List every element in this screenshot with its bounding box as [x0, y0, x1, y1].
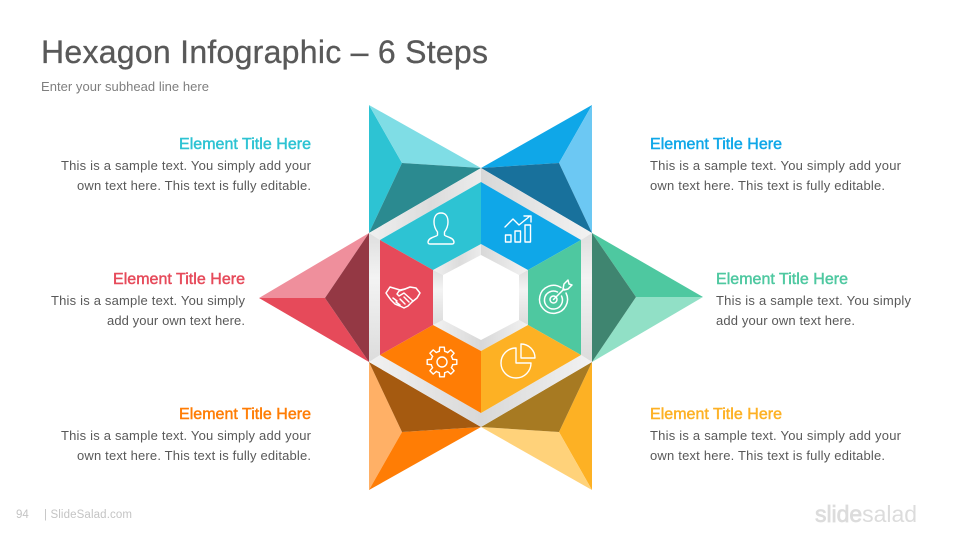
text block: top right: own text here. This text is fully editable. — [650, 178, 885, 193]
footer: page number: 94 — [16, 509, 29, 521]
tile: yellow with pie icon — [481, 325, 581, 413]
text block: bottom left — [61, 406, 312, 463]
icon: growth chart — [505, 216, 531, 242]
text block: bottom right: This is a sample text. You simply add your — [650, 428, 902, 443]
subhead: Enter your subhead line here — [41, 79, 209, 94]
text block: middle right: Element Title Here — [716, 271, 848, 288]
spike: blue — [481, 105, 592, 233]
text block: bottom left: This is a sample text. You simply add your — [61, 428, 312, 443]
tile: blue with chart icon — [481, 182, 581, 270]
spike: green — [592, 233, 703, 362]
text block: middle right — [716, 271, 912, 328]
text block: top right — [650, 136, 902, 193]
text block: bottom left: Element Title Here — [179, 406, 311, 423]
icon: handshake — [386, 287, 420, 308]
spike: yellow — [481, 362, 592, 490]
icon: gear — [427, 347, 457, 377]
text block: top left — [61, 136, 312, 193]
text block: middle left — [51, 271, 246, 328]
text block: bottom left: own text here. This text is fully editable. — [77, 448, 311, 463]
text block: top left: This is a sample text. You simply add your — [61, 158, 312, 173]
text block: middle right: add your own text here. — [716, 313, 855, 328]
tile: orange with gear icon — [380, 325, 481, 413]
text block: middle right: This is a sample text. You simply — [716, 293, 912, 308]
icon: target — [540, 280, 572, 313]
icon: pie chart — [501, 344, 535, 378]
icon: person — [428, 213, 454, 244]
tile: red with handshake icon — [380, 240, 433, 355]
spike: teal — [369, 105, 481, 233]
title: Hexagon Infographic – 6 Steps — [41, 34, 488, 70]
text block: middle left: add your own text here. — [107, 313, 245, 328]
text block: top right: Element Title Here — [650, 136, 782, 153]
text block: top right: This is a sample text. You simply add your — [650, 158, 902, 173]
footer: site name: | SlideSalad.com — [44, 509, 132, 521]
tile: teal with person icon — [380, 182, 481, 270]
text block: top left: own text here. This text is fully editable. — [77, 178, 311, 193]
text block: bottom right — [650, 406, 902, 463]
text block: middle left: This is a sample text. You simply — [51, 293, 246, 308]
text block: bottom right: Element Title Here — [650, 406, 782, 423]
spike: red — [259, 233, 369, 362]
text block: bottom right: own text here. This text is fully editable. — [650, 448, 885, 463]
spike: orange — [369, 362, 481, 490]
text block: middle left: Element Title Here — [113, 271, 245, 288]
hexagon frame — [369, 168, 592, 427]
tile: green with target icon — [528, 240, 581, 355]
logo: slidesalad — [815, 501, 917, 527]
text block: top left: Element Title Here — [179, 136, 311, 153]
